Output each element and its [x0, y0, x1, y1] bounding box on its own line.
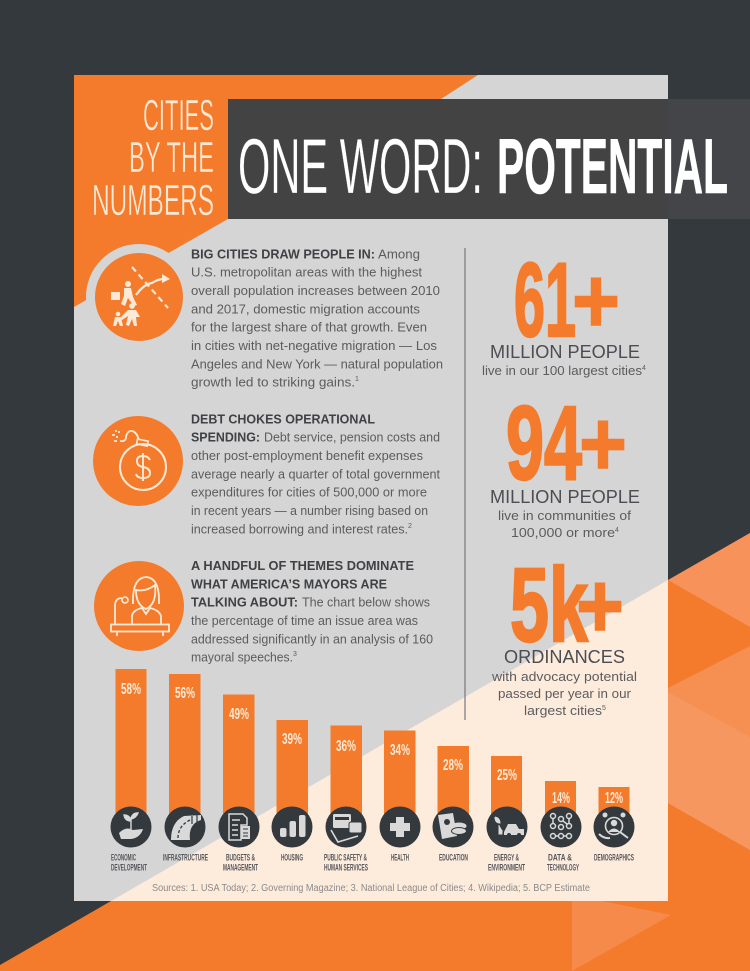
- stat: 94+ million people: 94: [506, 385, 582, 502]
- stat: 5k+ ordinances: largest cities: [524, 704, 602, 718]
- bar: infrastructure 56%: INFRASTRUCTURE: [163, 852, 208, 864]
- text block: big cities draw people in: [191, 246, 443, 390]
- text block: themes mayors talk about: mayoral speeches.: [191, 650, 293, 665]
- text block: big cities draw people in: and 2017, domestic migration accounts: [191, 301, 420, 316]
- bar: energy and environment 25%: ENERGY &: [494, 852, 519, 864]
- bar: public safety and human services 36%: PUBLIC SAFETY &: [324, 852, 367, 864]
- bar: public safety and human services 36%: [324, 726, 368, 874]
- stat: 61+ million people: [482, 242, 646, 378]
- text block: big cities draw people in: Among: [378, 246, 420, 261]
- bar: economic development 58%: 58%: [121, 681, 141, 698]
- text block: big cities draw people in: U.S. metropolitan areas with the highest: [191, 265, 422, 280]
- divider line: [464, 248, 466, 720]
- header band: [228, 99, 750, 219]
- bar: health 34%: [380, 730, 420, 864]
- stat: 5k+ ordinances: with advocacy potential: [491, 670, 637, 684]
- icon: mayor speaking: [94, 561, 184, 651]
- text block: themes mayors talk about: [191, 558, 433, 665]
- bar: health 34%: HEALTH: [391, 852, 409, 864]
- text block: big cities draw people in: for the largest share of that growth. Even: [191, 320, 427, 335]
- text block: themes mayors talk about: TALKING ABOUT:: [191, 595, 298, 610]
- bar: housing 39%: HOUSING: [281, 852, 303, 864]
- bar: budgets and management 49%: BUDGETS &: [226, 852, 255, 864]
- text block: big cities draw people in: 1: [355, 376, 359, 383]
- title: one word potential: ONE WORD:: [238, 122, 483, 210]
- stat: 5k+ ordinances: 5: [602, 705, 606, 712]
- text block: debt chokes spending: other post-employment benefit expenses: [191, 448, 423, 463]
- text block: debt chokes spending: average nearly a quarter of total government: [191, 466, 440, 481]
- icon: debt bomb: [93, 416, 183, 506]
- stat: 61+ million people: +: [572, 250, 620, 352]
- text block: themes mayors talk about: addressed significantly in an analysis of 160: [191, 631, 433, 646]
- heading: cities by the numbers: [92, 91, 214, 225]
- bar: health 34%: 34%: [390, 742, 410, 759]
- bar: infrastructure 56%: 56%: [175, 685, 195, 702]
- bar: public safety and human services 36%: HUMAN SERVICES: [324, 862, 368, 874]
- stat: 94+ million people: +: [579, 393, 627, 495]
- stat: 61+ million people: live in our 100 largest cities: [482, 364, 642, 378]
- heading: cities by the numbers: BY THE: [129, 133, 214, 182]
- heading: cities by the numbers: NUMBERS: [92, 176, 214, 225]
- text block: themes mayors talk about: 3: [293, 651, 297, 658]
- bar: energy and environment 25%: 25%: [497, 767, 517, 784]
- bar: economic development 58%: ECONOMIC: [111, 852, 136, 864]
- bar: infrastructure 56%: [163, 674, 208, 864]
- bar: demographics 12%: [594, 787, 634, 864]
- stat: 61+ million people: 4: [642, 365, 646, 372]
- heading: cities by the numbers: CITIES: [143, 91, 214, 140]
- bar: data and technology 14%: [540, 781, 582, 874]
- text block: big cities draw people in: in cities with net-negative migration — Los: [191, 338, 437, 353]
- bar: budgets and management 49%: 49%: [229, 706, 249, 723]
- text block: debt chokes spending: SPENDING:: [191, 430, 260, 445]
- stat: 5k+ ordinances: passed per year in our: [498, 687, 631, 701]
- stat: 61+ million people: MILLION PEOPLE: [490, 341, 640, 362]
- bar: demographics 12%: 12%: [605, 790, 623, 807]
- text block: big cities draw people in: growth led to striking gains.: [191, 375, 355, 390]
- bar: data and technology 14%: 14%: [552, 790, 570, 807]
- text block: themes mayors talk about: The chart below shows: [302, 595, 430, 610]
- bar: energy and environment 25%: [486, 756, 528, 874]
- bar: budgets and management 49%: MANAGEMENT: [223, 862, 258, 874]
- text block: themes mayors talk about: A HANDFUL OF THEMES DOMINATE: [191, 558, 414, 573]
- text block: themes mayors talk about: WHAT AMERICA’S MAYORS ARE: [191, 576, 387, 591]
- bar: economic development 58%: [110, 669, 152, 874]
- bar chart: mayoral speech themes: [110, 669, 634, 874]
- text block: big cities draw people in: Angeles and New York — natural population: [191, 356, 443, 371]
- stat: 5k+ ordinances: ORDINANCES: [504, 646, 625, 667]
- stat: 5k+ ordinances: [491, 547, 637, 718]
- text block: debt chokes spending: increased borrowing and interest rates.: [191, 521, 408, 536]
- bar: housing 39%: 39%: [282, 731, 302, 748]
- stat: 94+ million people: live in communities of: [498, 509, 632, 523]
- bar: education 28%: 28%: [443, 757, 463, 774]
- bar: demographics 12%: DEMOGRAPHICS: [594, 852, 634, 864]
- stat: 94+ million people: MILLION PEOPLE: [490, 486, 640, 507]
- text block: debt chokes spending: expenditures for cities of 500,000 or more: [191, 485, 427, 500]
- icon: migration: [86, 244, 192, 350]
- stat: 61+ million people: 61: [514, 242, 576, 359]
- bar: public safety and human services 36%: 36%: [336, 738, 356, 755]
- bar: data and technology 14%: TECHNOLOGY: [547, 862, 579, 874]
- stat: 94+ million people: 100,000 or more: [511, 526, 615, 540]
- sources note: Sources: 1. USA Today; 2. Governing Magazine; 3. National League of Cities; 4. Wikipedia; 5. BCP Estimate: [152, 883, 591, 894]
- bar: data and technology 14%: DATA &: [548, 852, 572, 864]
- bar: budgets and management 49%: [218, 694, 260, 874]
- bar: education 28%: EDUCATION: [439, 852, 468, 864]
- text block: big cities draw people in: BIG CITIES DRAW PEOPLE IN:: [191, 246, 375, 261]
- stat: 5k+ ordinances: 5k: [510, 547, 588, 664]
- text block: debt chokes spending: 2: [408, 523, 412, 530]
- bar: economic development 58%: DEVELOPMENT: [111, 862, 147, 874]
- bar: housing 39%: [272, 720, 312, 864]
- stat: 94+ million people: [490, 385, 640, 540]
- stat: 5k+ ordinances: +: [576, 555, 624, 657]
- text block: debt chokes spending: DEBT CHOKES OPERATIONAL: [191, 411, 375, 426]
- text block: big cities draw people in: overall population increases between 2010: [191, 283, 440, 298]
- bar: education 28%: [432, 746, 474, 864]
- text block: debt chokes spending: [191, 411, 440, 536]
- panel: main sheet: [74, 75, 668, 901]
- bar: energy and environment 25%: ENVIRONMENT: [488, 862, 525, 874]
- text block: debt chokes spending: in recent years — a number rising based on: [191, 503, 428, 518]
- text block: themes mayors talk about: the percentage of time an issue area was: [191, 613, 418, 628]
- text block: debt chokes spending: Debt service, pension costs and: [264, 430, 440, 445]
- stat: 94+ million people: 4: [615, 527, 619, 534]
